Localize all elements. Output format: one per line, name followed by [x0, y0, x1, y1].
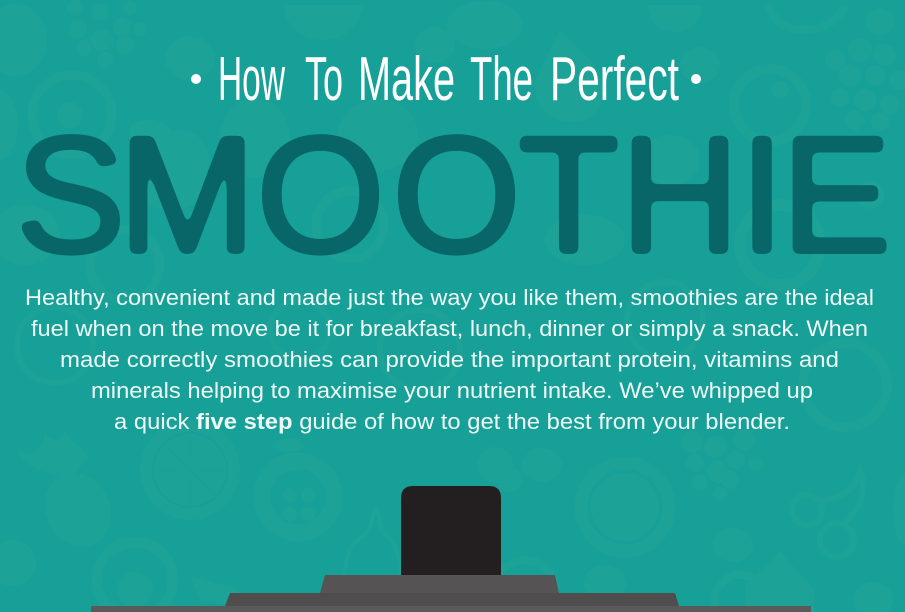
left bullet: [191, 74, 201, 84]
subtitle: How To Make The Perfect: [191, 45, 701, 114]
blender jug base: [401, 486, 501, 575]
line 5: a quick five step guide of how to get the best from your blender.: [114, 409, 790, 434]
intro paragraph: [25, 285, 874, 434]
title: SMOOTHIE: SMOOTHIE: [15, 103, 892, 288]
subtitle text: The: [470, 45, 533, 114]
blender shoulder: [225, 593, 679, 606]
line 1: Healthy, convenient and made just the way you like them, smoothies are the ideal: [25, 285, 874, 310]
subtitle text: How: [218, 45, 285, 114]
blender collar: [320, 575, 559, 593]
subtitle text: Make: [358, 45, 455, 114]
right bullet: [691, 74, 701, 84]
subtitle text: To: [305, 45, 343, 114]
blender body top: [91, 606, 811, 612]
line 2: fuel when on the move be it for breakfast, lunch, dinner or simply a snack. When: [31, 316, 868, 341]
line 3: made correctly smoothies can provide the important protein, vitamins and: [60, 347, 839, 372]
blender illustration: [91, 486, 811, 612]
line 4: minerals helping to maximise your nutrient intake. We’ve whipped up: [91, 378, 813, 403]
subtitle text: Perfect: [550, 45, 679, 114]
